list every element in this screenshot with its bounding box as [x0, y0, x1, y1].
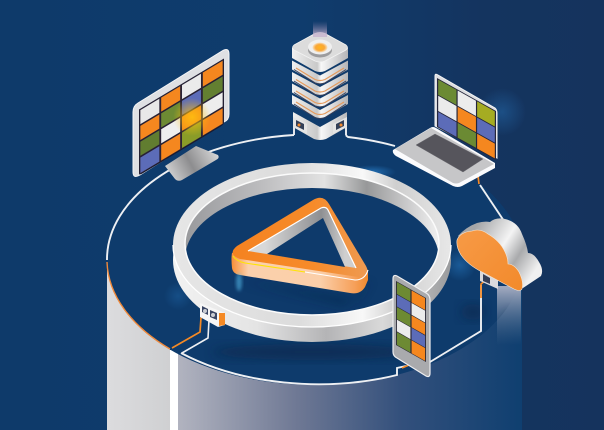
ring outer side	[173, 178, 451, 342]
triangle small glow	[236, 273, 242, 291]
laptop base	[393, 127, 495, 187]
cloud face	[457, 230, 523, 290]
laptop	[393, 74, 497, 187]
ring	[173, 163, 451, 342]
server cup	[308, 42, 332, 58]
cloud	[457, 218, 542, 290]
server beam	[313, 21, 327, 37]
phone	[393, 275, 430, 377]
background glow behind laptop	[478, 88, 526, 136]
monitor screen glow	[173, 98, 211, 136]
triangle extrusion	[232, 250, 368, 293]
laptop cells	[438, 80, 495, 158]
triangle hole	[267, 218, 345, 267]
phone cells	[397, 282, 425, 361]
ring top face	[173, 163, 451, 327]
orange wire links	[172, 176, 486, 368]
wires: circuit ring	[107, 127, 504, 384]
triangle highlights	[248, 207, 356, 268]
screen cells	[140, 60, 223, 174]
disk top surface	[107, 135, 523, 385]
shadows on disk	[212, 304, 523, 360]
server base	[293, 112, 347, 140]
server tier grooves	[294, 104, 346, 118]
server left port	[293, 117, 307, 134]
column under cloud	[497, 286, 521, 346]
cloud extrusion	[458, 218, 542, 288]
server right port	[333, 117, 347, 134]
phone screen	[396, 281, 426, 362]
laptop screen	[435, 74, 497, 158]
cylinder platform	[107, 135, 523, 430]
glow near connector	[164, 282, 192, 310]
ring connector box	[200, 303, 225, 327]
phone frame	[393, 275, 430, 377]
ring inner floor	[186, 188, 438, 314]
server	[292, 21, 348, 140]
monitor stand	[165, 146, 219, 181]
orange rim	[107, 262, 170, 349]
ring glow	[348, 165, 396, 179]
cloud port	[480, 271, 498, 289]
monitor frame	[133, 50, 229, 176]
laptop keyboard	[416, 134, 483, 172]
server top tier	[292, 48, 348, 72]
ring inner wall	[185, 173, 439, 315]
triangle shadow	[238, 280, 372, 305]
monitor	[133, 50, 229, 181]
triangle top face	[233, 198, 368, 277]
monitor screen	[139, 58, 224, 176]
server tiers	[292, 60, 348, 118]
triangle inner wall	[248, 207, 356, 268]
server top face	[292, 32, 348, 62]
glow under cloud	[444, 249, 476, 281]
triangle	[232, 198, 368, 293]
